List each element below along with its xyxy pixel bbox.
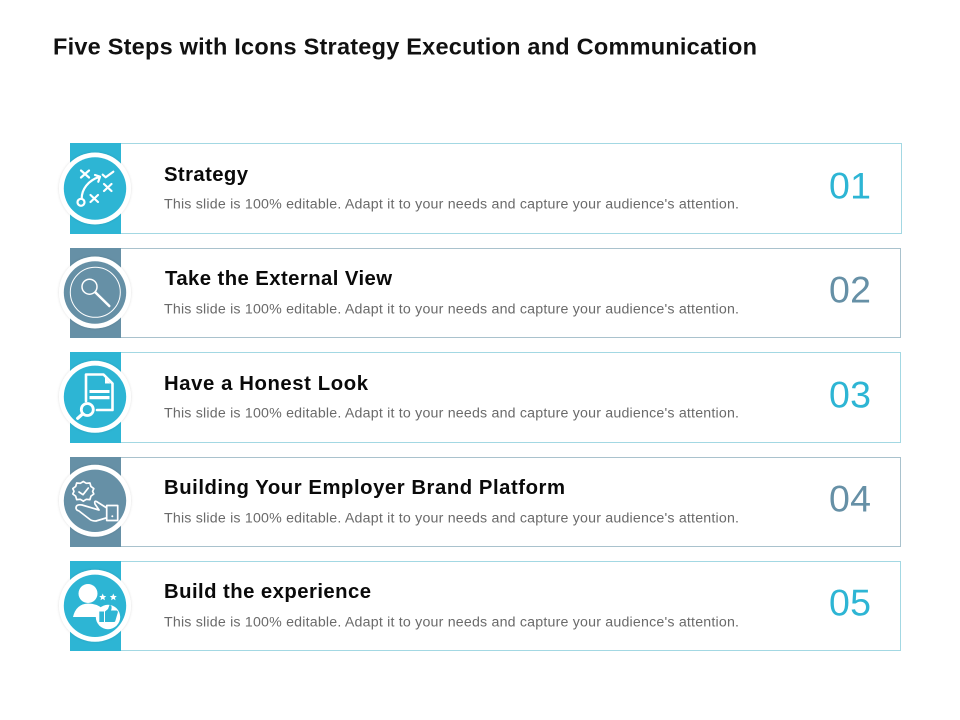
- icon badge 4: hand with badge: [59, 465, 131, 537]
- icon badge 3: document search: [59, 361, 131, 433]
- panel: step 4 employer brand: [59, 457, 900, 547]
- number 4: 04: [829, 478, 871, 520]
- number 3: 03: [829, 374, 871, 416]
- panel: step 2 external view: [59, 248, 900, 338]
- colour band 4: [70, 457, 121, 547]
- colour band 2: [70, 248, 121, 338]
- panel frame 5: [70, 562, 900, 650]
- heading 3: Have a Honest Look: [164, 373, 369, 395]
- heading 1: Strategy: [164, 164, 249, 186]
- panel: step 5 build experience: [59, 561, 900, 651]
- panel frame 3: [70, 352, 900, 442]
- panel frame 1: [70, 144, 902, 234]
- title: Five Steps with Icons Strategy Execution and Communication: [53, 34, 757, 60]
- panel frame 4: [70, 458, 900, 546]
- number 1: 01: [829, 164, 871, 206]
- colour band 1: [70, 143, 121, 234]
- panel frame 2: [70, 248, 900, 338]
- panel: step 3 honest look: [59, 352, 900, 443]
- heading 4: Building Your Employer Brand Platform: [164, 477, 565, 499]
- colour band 3: [70, 352, 121, 443]
- icon badge 1: play strategy: [59, 152, 131, 224]
- panel: step 1 strategy: [59, 143, 902, 234]
- number 2: 02: [829, 268, 871, 310]
- icon badge 5: person with thumbs up: [59, 570, 131, 642]
- icon badge 2: magnifier: [59, 256, 131, 328]
- heading 5: Build the experience: [164, 581, 371, 603]
- number 5: 05: [829, 582, 871, 624]
- heading 2: Take the External View: [165, 268, 392, 290]
- description 4: This slide is 100% editable. Adapt it to your needs and capture your audience's attention.: [164, 510, 739, 526]
- description 2: This slide is 100% editable. Adapt it to your needs and capture your audience's attention.: [164, 302, 739, 318]
- colour band 5: [70, 561, 121, 651]
- description 1: This slide is 100% editable. Adapt it to your needs and capture your audience's attention.: [164, 196, 739, 212]
- description 5: This slide is 100% editable. Adapt it to your needs and capture your audience's attention.: [164, 614, 739, 630]
- description 3: This slide is 100% editable. Adapt it to your needs and capture your audience's attention.: [164, 406, 739, 422]
